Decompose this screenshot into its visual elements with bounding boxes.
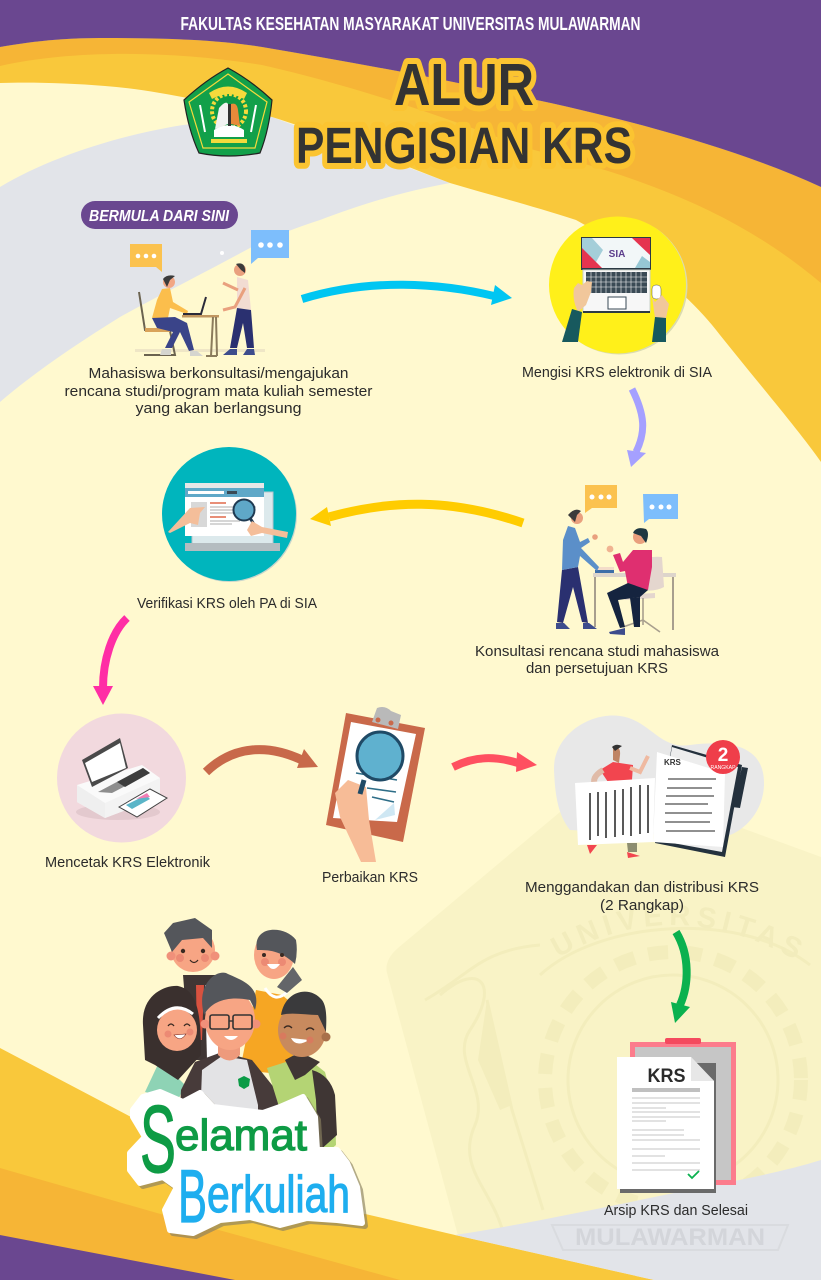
group of students illustration bbox=[143, 918, 337, 1160]
sticker word: Berkuliah: erkuliah bbox=[207, 1166, 350, 1224]
badge: 2 rangkap: RANGKAP bbox=[710, 765, 736, 771]
background: orange swoosh top bbox=[0, 38, 821, 283]
step 7: duplication illustration bbox=[554, 716, 764, 858]
step 7 caption bbox=[525, 880, 759, 914]
sticker word: Selamat: S bbox=[140, 1086, 176, 1193]
step 2: laptop on SIA illustration bbox=[549, 216, 688, 354]
logo: university crest bbox=[184, 68, 272, 156]
sticker word: Berkuliah bbox=[178, 1154, 350, 1238]
step 8: archive document illustration bbox=[617, 1038, 736, 1193]
arrow: step 4 to 5 bbox=[93, 618, 127, 705]
step 3 caption bbox=[475, 644, 720, 677]
table and books bbox=[593, 567, 676, 630]
background: university emblem watermark bbox=[386, 812, 821, 1234]
background: grey wedge bottom right bbox=[455, 1160, 821, 1280]
step 1 caption: yang akan berlangsung bbox=[136, 401, 302, 417]
background: purple header band bbox=[0, 0, 821, 187]
badge: 2 rangkap: 2 bbox=[718, 745, 728, 766]
sticker word: Selamat bbox=[140, 1086, 307, 1193]
start badge: BERMULA DARI SINI bbox=[89, 208, 230, 225]
title bbox=[296, 52, 632, 174]
step 8: archive document illustration: KRS bbox=[648, 1066, 686, 1087]
arrow: step 6 to 7 bbox=[453, 752, 537, 772]
step 5: printer illustration bbox=[57, 714, 186, 842]
step 3 caption: dan persetujuan KRS bbox=[526, 661, 668, 677]
watermark: UNIVERSITAS arc: UNIVERSITAS bbox=[550, 905, 802, 957]
title: ALUR bbox=[394, 52, 534, 118]
badge: 2 rangkap bbox=[706, 740, 740, 774]
background: yellow wedge bottom bbox=[0, 1048, 654, 1280]
sticker word: Selamat: elamat bbox=[175, 1111, 307, 1160]
background: purple wedge bottom bbox=[0, 1235, 235, 1280]
sticker white blob bbox=[130, 1092, 362, 1233]
arrow: step 5 to 6 bbox=[206, 749, 318, 772]
standing student bbox=[556, 510, 599, 629]
step 5 caption: Mencetak KRS Elektronik bbox=[45, 855, 211, 871]
step 7 caption: Menggandakan dan distribusi KRS bbox=[525, 880, 759, 896]
watermark: MULAWARMAN ribbon: MULAWARMAN bbox=[575, 1224, 765, 1251]
step 7 caption: (2 Rangkap) bbox=[600, 898, 684, 914]
sticker word: Berkuliah: B bbox=[178, 1154, 207, 1238]
seated advisor bbox=[607, 528, 664, 635]
header text: FAKULTAS KESEHATAN MASYARAKAT UNIVERSITAS MULAWARMAN bbox=[180, 14, 640, 34]
start badge bbox=[81, 201, 238, 229]
step 4 caption: Verifikasi KRS oleh PA di SIA bbox=[137, 596, 317, 612]
background: grey wedge top-left bbox=[0, 117, 450, 402]
arrow: step 1 to 2 bbox=[302, 285, 512, 305]
step 7: duplication illustration: KRS bbox=[664, 758, 682, 767]
step 1 caption: Mahasiswa berkonsultasi/mengajukan bbox=[88, 366, 348, 382]
arrow: step 3 to 4 bbox=[310, 504, 523, 526]
arrow: step 7 to 8 bbox=[671, 932, 690, 1023]
step 2: laptop on SIA illustration: SIA bbox=[609, 249, 625, 260]
step 2 caption: Mengisi KRS elektronik di SIA bbox=[522, 365, 712, 381]
step 1 caption bbox=[64, 366, 373, 417]
step 1: student consulting illustration bbox=[130, 230, 289, 356]
title: PENGISIAN KRS bbox=[296, 117, 632, 174]
step 6 caption: Perbaikan KRS bbox=[322, 870, 418, 886]
arrow: step 2 to 3 bbox=[627, 389, 646, 467]
sticker shadow blob bbox=[133, 1095, 365, 1236]
background: yellow swoosh top bbox=[0, 38, 821, 462]
sticker: Selamat Berkuliah bbox=[130, 1086, 365, 1238]
step 8 caption: Arsip KRS dan Selesai bbox=[604, 1203, 748, 1219]
step 1 caption: rencana studi/program mata kuliah semester bbox=[64, 384, 373, 400]
background: orange wedge bottom bbox=[0, 1168, 400, 1280]
step 6: clipboard and magnifier illustration bbox=[326, 707, 425, 862]
step 3 caption: Konsultasi rencana studi mahasiswa bbox=[475, 644, 720, 660]
step 4: verification illustration bbox=[162, 447, 297, 582]
step 3: consultation illustration bbox=[556, 485, 678, 635]
